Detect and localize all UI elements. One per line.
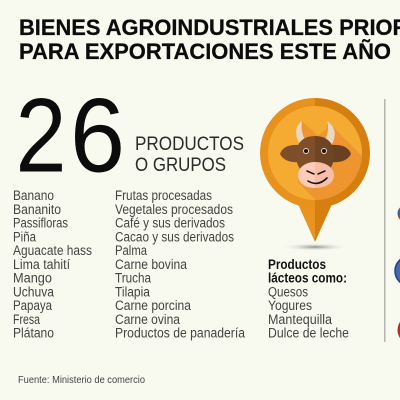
product list: column 2: Tilapia [115,284,150,299]
product list: column 1: Bananito [13,202,61,217]
title [19,15,400,64]
product list: dairy products [268,257,349,341]
product list: column 2: Café y sus derivados [115,216,225,230]
product list: column 1 [13,188,92,341]
divider line [384,99,386,342]
product list: column 2: Carne bovina [115,257,187,272]
product list: column 1: Uchuva [13,284,54,299]
product list: column 1: Mango [13,271,52,286]
big number 26: 6 [70,78,125,194]
product list: dairy products: Mantequilla [268,312,332,327]
product list: dairy products: Quesos [268,284,308,299]
product list: column 2: Cacao y sus derivados [115,229,234,244]
icon: blue circle, clipped [395,256,400,286]
product list: column 1: Lima tahití [13,257,70,272]
product list: dairy products: Dulce de leche [268,326,349,341]
product list: column 2 [115,188,245,341]
product list: column 1: Fresa [13,312,40,327]
product list: dairy products: Productos [268,257,326,272]
product list: column 2: Frutas procesadas [115,188,212,203]
product list: column 2: Carne porcina [115,298,191,313]
product list: column 1: Plátano [13,326,54,341]
product list: column 2: Trucha [115,271,151,286]
big number 26: 2 [16,78,66,194]
icon: cow map pin [260,98,370,251]
big number 26 [16,78,125,194]
product list: column 2: Vegetales procesados [115,202,233,217]
subtitle: productos o grupos: O GRUPOS [135,155,226,176]
subtitle: productos o grupos: PRODUCTOS [135,134,244,155]
icon: flag circle, clipped [398,205,400,222]
title: PARA EXPORTACIONES ESTE AÑO [19,39,391,64]
product list: column 1: Piña [13,229,36,244]
product list: dairy products: Yogures [268,298,312,313]
product list: dairy products: lácteos como: [268,271,347,286]
source note: Fuente: Ministerio de comercio [18,375,145,386]
icon: red circle, clipped [398,316,400,344]
product list: column 1: Papaya [13,298,52,313]
product list: column 1: Aguacate hass [13,243,92,258]
product list: column 1: Banano [13,188,54,203]
product list: column 2: Carne ovina [115,312,180,327]
product list: column 1: Passifloras [13,216,68,230]
product list: column 2: Palma [115,243,147,258]
subtitle: productos o grupos [135,134,244,176]
product list: column 2: Productos de panadería [115,326,245,341]
